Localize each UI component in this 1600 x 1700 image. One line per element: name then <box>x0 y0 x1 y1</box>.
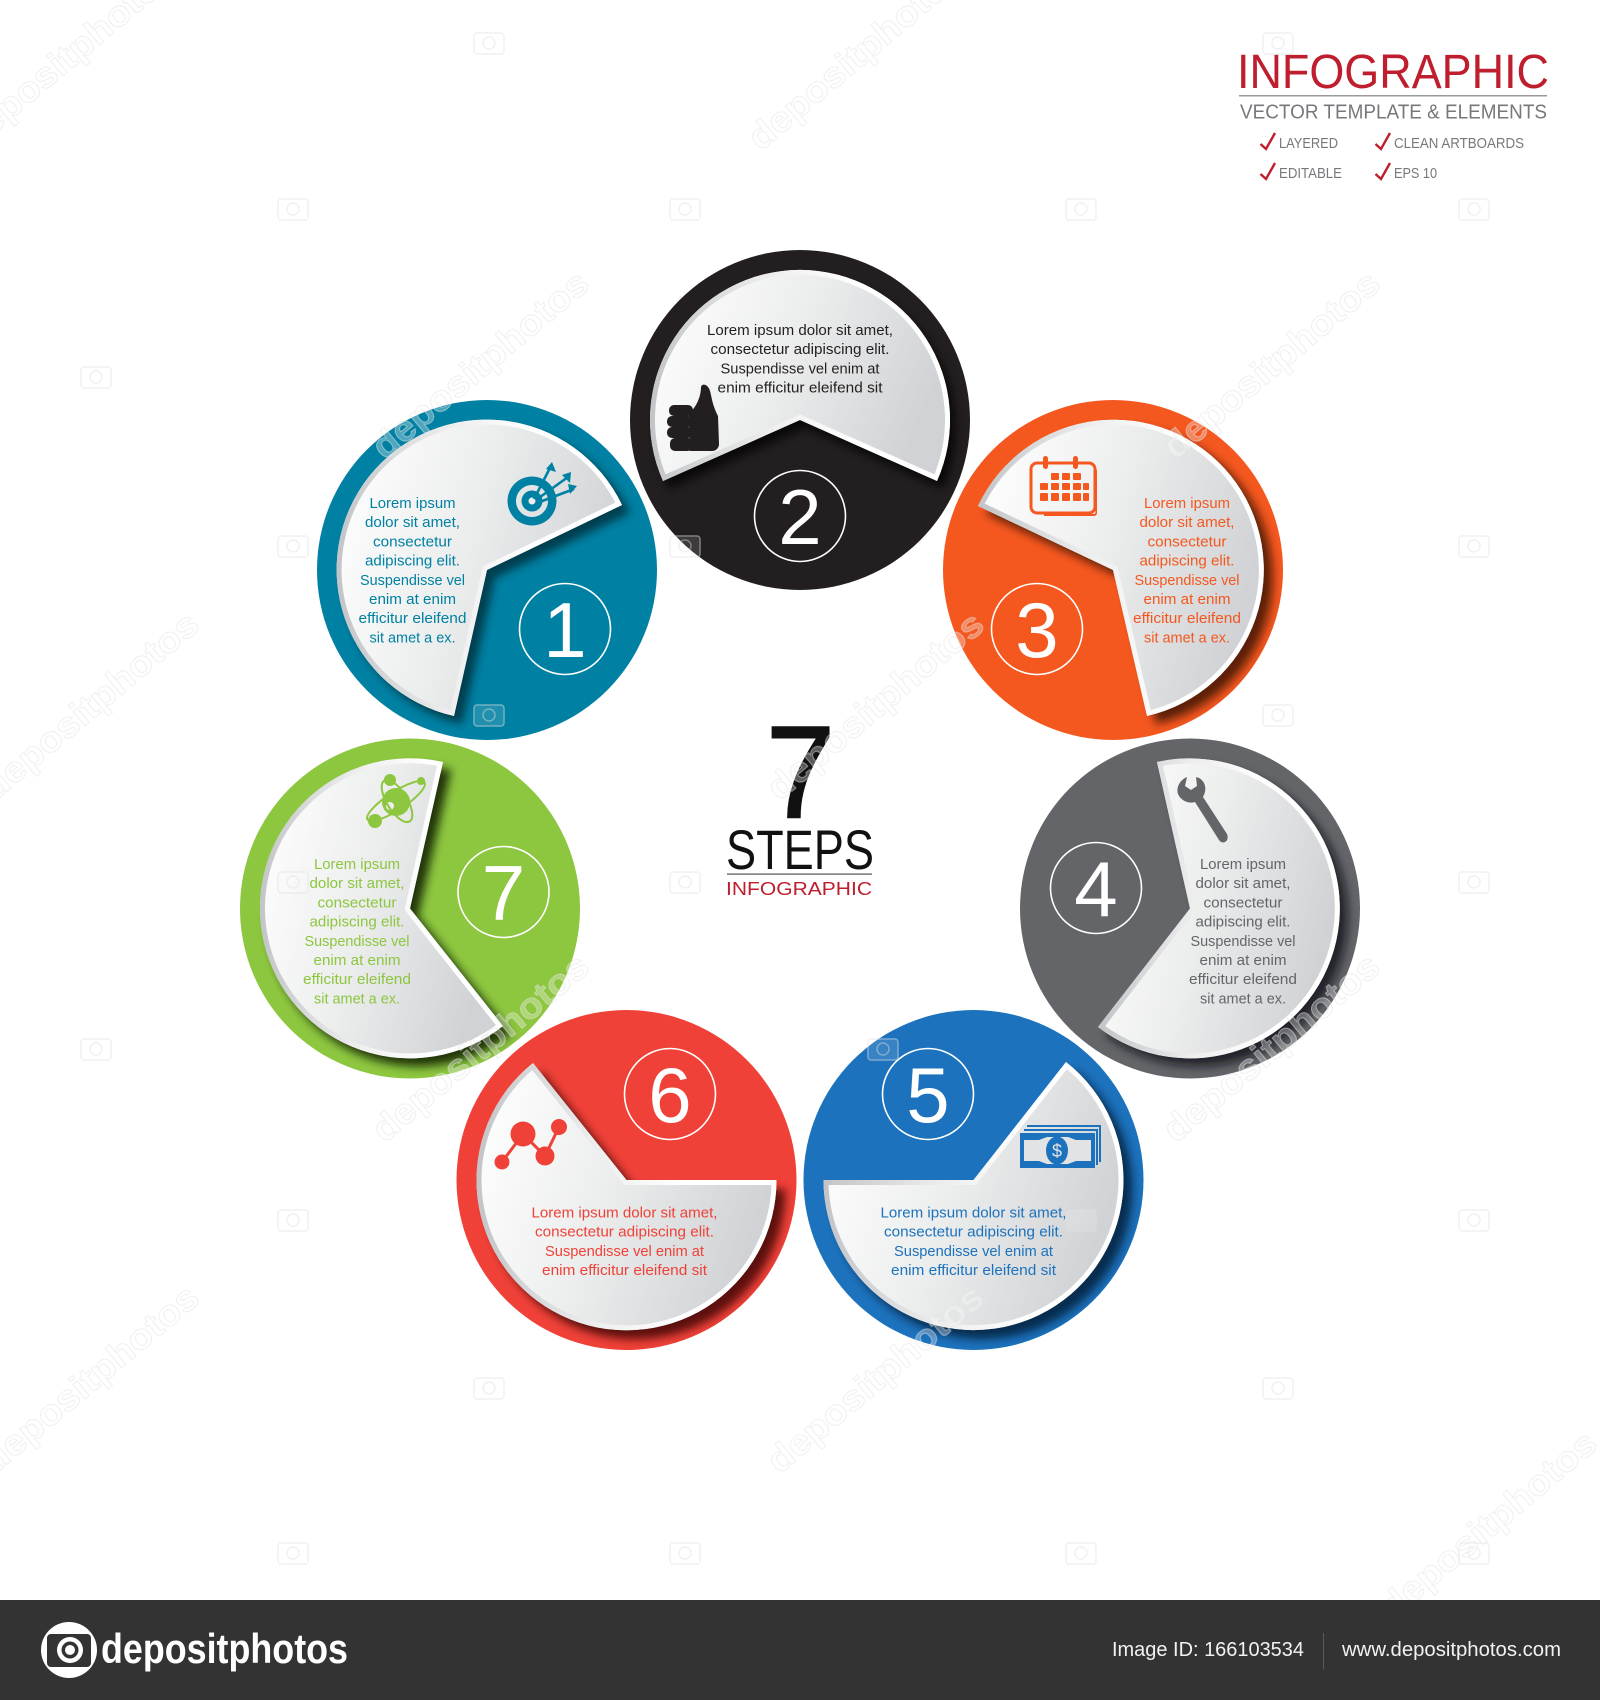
text: step 6: Suspendisse vel enim at <box>545 1244 704 1260</box>
text: depositphotos <box>1371 1422 1600 1627</box>
text: step 4: enim at enim <box>1200 953 1286 969</box>
text: step 1: enim at enim <box>369 592 456 608</box>
text: step 4: Suspendisse vel <box>1190 934 1296 950</box>
number badge 2 <box>754 470 846 562</box>
number badge 7 <box>458 846 549 938</box>
text: step 6: enim efficitur eleifend sit <box>542 1263 707 1279</box>
text: step 7: dolor sit amet, <box>310 876 404 892</box>
text: step 2: enim efficitur eleifend sit <box>718 381 882 397</box>
text: step 4: dolor sit amet, <box>1196 876 1290 892</box>
text: depositphotos <box>363 262 597 467</box>
text: step 6: Lorem ipsum dolor sit amet, <box>532 1206 718 1222</box>
feature list: EDITABLE <box>1279 165 1342 182</box>
text: step 3: sit amet a ex. <box>1144 630 1230 646</box>
number badge 3 <box>992 584 1082 674</box>
number badge 6 <box>624 1048 716 1140</box>
number badge 4: 4 <box>1074 845 1118 933</box>
panel: step 1 teal <box>317 400 657 740</box>
text: step 3: enim at enim <box>1144 592 1230 608</box>
text: depositphotos <box>758 1276 992 1481</box>
text: step 2: consectetur adipiscing elit. <box>710 342 890 358</box>
feature list <box>1260 133 1524 182</box>
center title: 7 steps infographic <box>726 700 874 899</box>
text: step 1: Lorem ipsum <box>370 496 456 512</box>
text: step 3: efficitur eleifend <box>1133 611 1241 627</box>
number badge 1 <box>520 584 610 674</box>
text: depositphotos <box>1154 945 1388 1150</box>
number badge 1: 1 <box>543 586 587 674</box>
text: step 1: consectetur <box>373 534 452 550</box>
text: step 5: Suspendisse vel enim at <box>894 1244 1053 1260</box>
website url: www.depositphotos.com <box>1341 1639 1561 1661</box>
number badge 5 <box>882 1048 974 1140</box>
text: step 5 <box>880 1206 1066 1279</box>
image id: Image ID: 166103534 <box>1112 1639 1304 1661</box>
text: step 5: Lorem ipsum dolor sit amet, <box>880 1206 1066 1222</box>
text: step 4 <box>1189 857 1297 1007</box>
text: step 7: Lorem ipsum <box>314 857 400 873</box>
text: depositphotos <box>758 603 992 808</box>
footer bar <box>0 1600 1600 1700</box>
text: step 3: consectetur <box>1148 534 1227 550</box>
feature list: CLEAN ARTBOARDS <box>1394 135 1524 152</box>
text: step 1: Suspendisse vel <box>360 573 465 589</box>
text: step 7: enim at enim <box>314 953 400 969</box>
text: step 1: sit amet a ex. <box>370 630 456 646</box>
text: step 7: consectetur <box>318 895 397 911</box>
text: step 3: adipiscing elit. <box>1140 554 1234 570</box>
text: step 2: Suspendisse vel enim at <box>720 361 880 377</box>
text: step 6: consectetur adipiscing elit. <box>535 1225 714 1241</box>
icon: wrench <box>1177 777 1228 842</box>
text: step 7: efficitur eleifend <box>303 972 411 988</box>
icon: target with arrows <box>508 462 577 525</box>
text: depositphotos <box>363 945 597 1150</box>
panel: step 5 blue <box>804 1010 1144 1350</box>
big numeral 7: 7 <box>767 700 834 845</box>
subheading: VECTOR TEMPLATE & ELEMENTS <box>1240 102 1547 124</box>
text: step 1: adipiscing elit. <box>365 554 460 570</box>
feature list: EPS 10 <box>1394 165 1437 182</box>
panel: step 2 black <box>630 250 970 590</box>
text: step 1: dolor sit amet, <box>365 515 460 531</box>
logo wordmark: depositphotos <box>101 1625 348 1672</box>
number badge 6: 6 <box>648 1051 692 1139</box>
icon: thumbs up <box>667 385 719 451</box>
text: step 6 <box>532 1206 718 1279</box>
text: step 4: sit amet a ex. <box>1200 991 1286 1007</box>
text: step 4: consectetur <box>1204 895 1283 911</box>
text: step 7 <box>303 857 411 1007</box>
text: step 2: Lorem ipsum dolor sit amet, <box>707 323 893 339</box>
text: step 4: Lorem ipsum <box>1200 857 1286 873</box>
number badge 5: 5 <box>906 1051 950 1139</box>
text: step 1 <box>358 496 466 646</box>
icon: calendar <box>1031 456 1097 516</box>
panel: step 6 red <box>456 1010 796 1350</box>
text: step 4: efficitur eleifend <box>1189 972 1297 988</box>
text: step 7: Suspendisse vel <box>304 934 410 950</box>
text: step 5: consectetur adipiscing elit. <box>884 1225 1063 1241</box>
text: step 7: sit amet a ex. <box>314 991 400 1007</box>
text: step 1: efficitur eleifend <box>358 611 466 627</box>
number badge 2: 2 <box>778 473 822 561</box>
icon: atom <box>363 774 429 828</box>
text: step 5: enim efficitur eleifend sit <box>891 1263 1056 1279</box>
text: depositphotos <box>1154 262 1388 467</box>
icon: money bills: $ <box>1052 1141 1062 1161</box>
text: step 3 <box>1133 496 1241 646</box>
panel: step 3 orange <box>943 400 1283 740</box>
panel: step 7 green <box>240 738 580 1078</box>
header block: infographic vector template <box>1237 46 1549 182</box>
text: step 3: Lorem ipsum <box>1144 496 1230 512</box>
icon: network nodes <box>494 1119 567 1170</box>
number badge 7: 7 <box>482 849 525 937</box>
INFOGRAPHIC label: INFOGRAPHIC <box>726 878 872 899</box>
text: step 2 <box>707 323 893 397</box>
text: step 3: Suspendisse vel <box>1134 573 1240 589</box>
logo: camera icon <box>41 1622 97 1678</box>
STEPS label: STEPS <box>726 818 874 881</box>
number badge 3: 3 <box>1015 586 1059 674</box>
text: step 4: adipiscing elit. <box>1196 915 1290 931</box>
heading: INFOGRAPHIC: INFOGRAPHIC <box>1237 46 1549 99</box>
feature list: LAYERED <box>1279 135 1338 152</box>
text: step 7: adipiscing elit. <box>310 915 404 931</box>
text: step 3: dolor sit amet, <box>1140 515 1234 531</box>
number badge 4 <box>1050 842 1142 934</box>
icon: money bills <box>1020 1125 1101 1168</box>
panel: step 4 gray <box>1020 738 1360 1078</box>
